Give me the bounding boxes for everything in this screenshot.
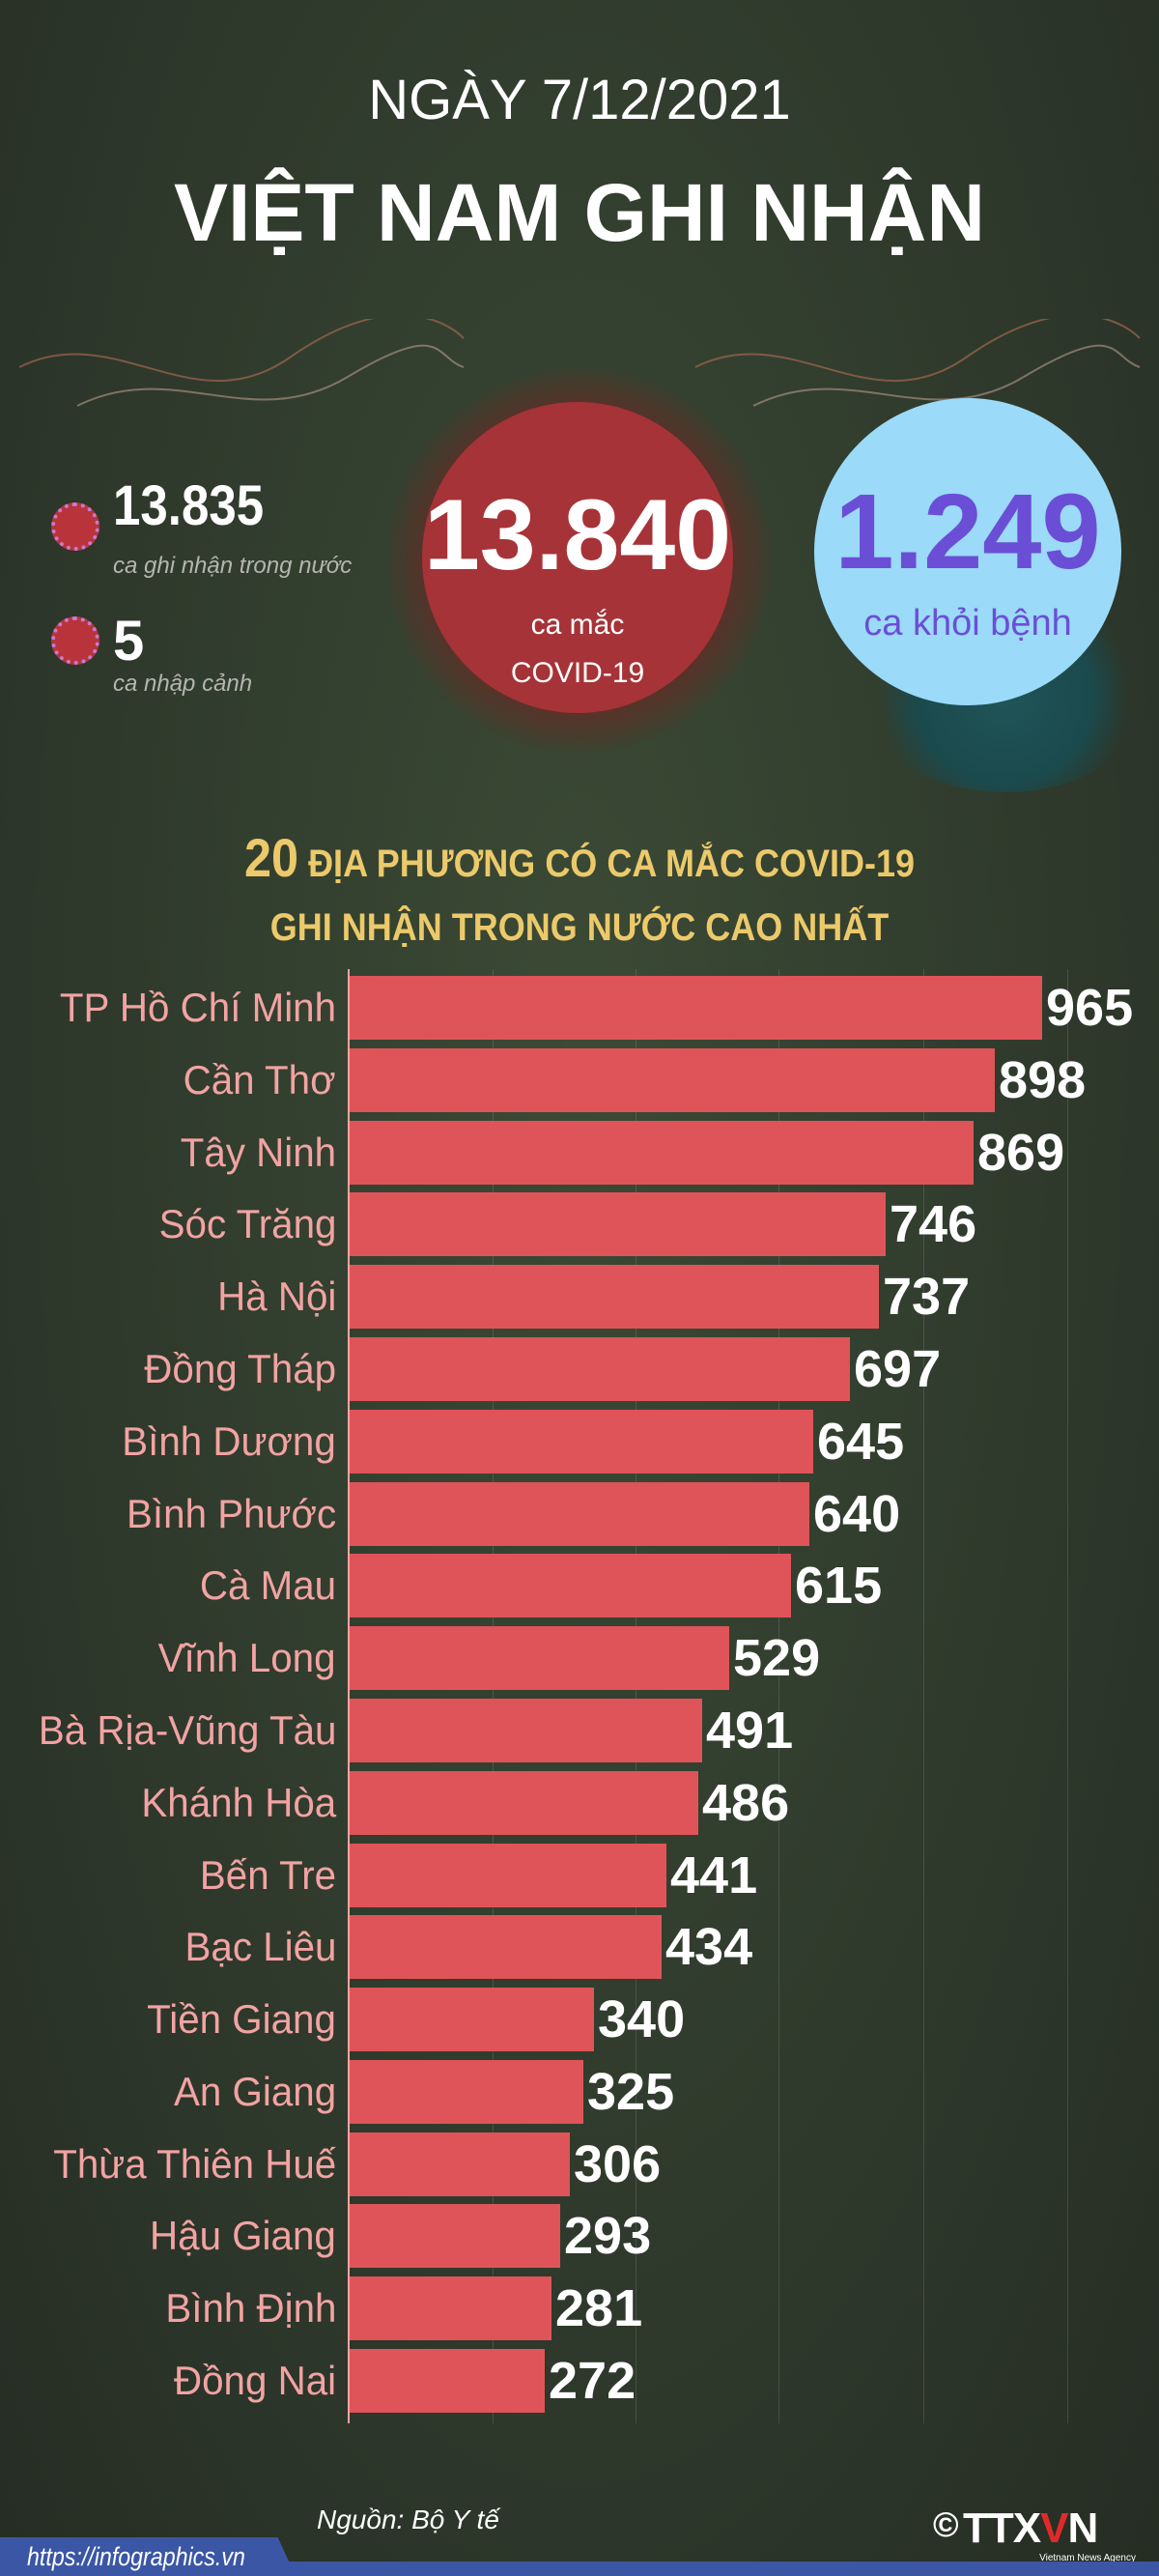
source note: Nguồn: Bộ Y tế (317, 2504, 499, 2534)
decorative waves (19, 319, 1141, 407)
bar chart: 486 (702, 1774, 789, 1832)
bar chart (38, 969, 1133, 2423)
bar chart: 491 (706, 1702, 793, 1760)
text: Vietnam News Agency (1039, 2553, 1136, 2563)
bar chart: 441 (670, 1846, 757, 1904)
chart grid (493, 969, 494, 2423)
bar chart: 340 (598, 1990, 685, 2048)
stat: domestic cases (51, 474, 352, 579)
bar chart: Thừa Thiên Huế (53, 2141, 336, 2187)
chart heading: 20 ĐỊA PHƯƠNG CÓ CA MẮC COVID-19 (244, 827, 915, 888)
bar chart: 325 (587, 2063, 674, 2121)
circle: total cases (422, 402, 733, 713)
footer bar (0, 2562, 1159, 2576)
icon: virus (51, 502, 99, 551)
logo: TTXVN: © TTXVN (933, 2504, 1097, 2552)
title main: VIỆT NAM GHI NHẬN (174, 167, 985, 258)
bar chart: 746 (890, 1195, 976, 1253)
bar chart: Tiền Giang (147, 1996, 336, 2042)
bar chart: 898 (999, 1051, 1086, 1109)
bar chart: 529 (733, 1629, 820, 1687)
bar chart: Bình Dương (122, 1418, 336, 1464)
bar chart: 645 (817, 1413, 904, 1471)
title date: NGÀY 7/12/2021 (368, 69, 791, 131)
bar chart: Cà Mau (200, 1562, 336, 1608)
decorative virus red (386, 367, 773, 754)
circle: recovered (814, 398, 1121, 705)
circle: recovered: 1.249 (834, 472, 1101, 591)
bar chart: Tây Ninh (181, 1130, 336, 1175)
bar chart: Đồng Tháp (144, 1346, 336, 1391)
bar chart: 306 (574, 2135, 661, 2193)
chart heading (244, 827, 915, 949)
bar chart: 869 (977, 1124, 1064, 1182)
bar chart: Cần Thơ (184, 1057, 336, 1102)
bar chart: Bình Định (165, 2285, 336, 2331)
bar chart: Bến Tre (200, 1852, 336, 1898)
bar chart: Bạc Liêu (184, 1924, 336, 1969)
bar chart: 697 (854, 1340, 941, 1398)
footer url tab (0, 2537, 289, 2570)
bar chart: 965 (1046, 979, 1133, 1037)
circle: total cases: COVID-19 (511, 657, 644, 689)
stat: domestic cases: ca ghi nhận trong nước (113, 553, 352, 579)
bar chart: 615 (795, 1557, 882, 1615)
bar chart: Bà Rịa-Vũng Tàu (38, 1707, 336, 1753)
bar chart: Khánh Hòa (141, 1780, 336, 1825)
footer url tab: https://infographics.vn (27, 2542, 245, 2571)
bar chart: 640 (813, 1485, 900, 1543)
circle: recovered: ca khỏi bệnh (863, 603, 1072, 644)
icon: virus (51, 616, 99, 665)
bar chart: Đồng Nai (174, 2358, 336, 2403)
chart heading: GHI NHẬN TRONG NƯỚC CAO NHẤT (270, 906, 889, 949)
stat: imported cases: 5 (113, 610, 144, 673)
circle: total cases: 13.840 (424, 479, 731, 591)
bar chart: 281 (555, 2279, 642, 2337)
bar chart: Sóc Trăng (158, 1201, 336, 1246)
bar chart: Hậu Giang (150, 2213, 336, 2258)
bar chart: 737 (883, 1268, 970, 1326)
bar chart: Hà Nội (217, 1274, 336, 1319)
bar chart: 293 (564, 2207, 651, 2265)
stat: imported cases (51, 610, 252, 697)
bar chart: 272 (549, 2352, 636, 2410)
bar chart: Vĩnh Long (158, 1635, 336, 1680)
stat: domestic cases: 13.835 (113, 474, 264, 537)
circle: total cases: ca mắc (531, 609, 624, 641)
bar chart: Bình Phước (127, 1491, 336, 1536)
bar chart: 434 (665, 1918, 752, 1976)
decorative virus teal (860, 599, 1149, 792)
bar chart: An Giang (174, 2069, 336, 2114)
logo: TTXVN (933, 2504, 1136, 2563)
bar chart: TP Hồ Chí Minh (60, 985, 336, 1030)
stat: imported cases: ca nhập cảnh (113, 671, 252, 697)
